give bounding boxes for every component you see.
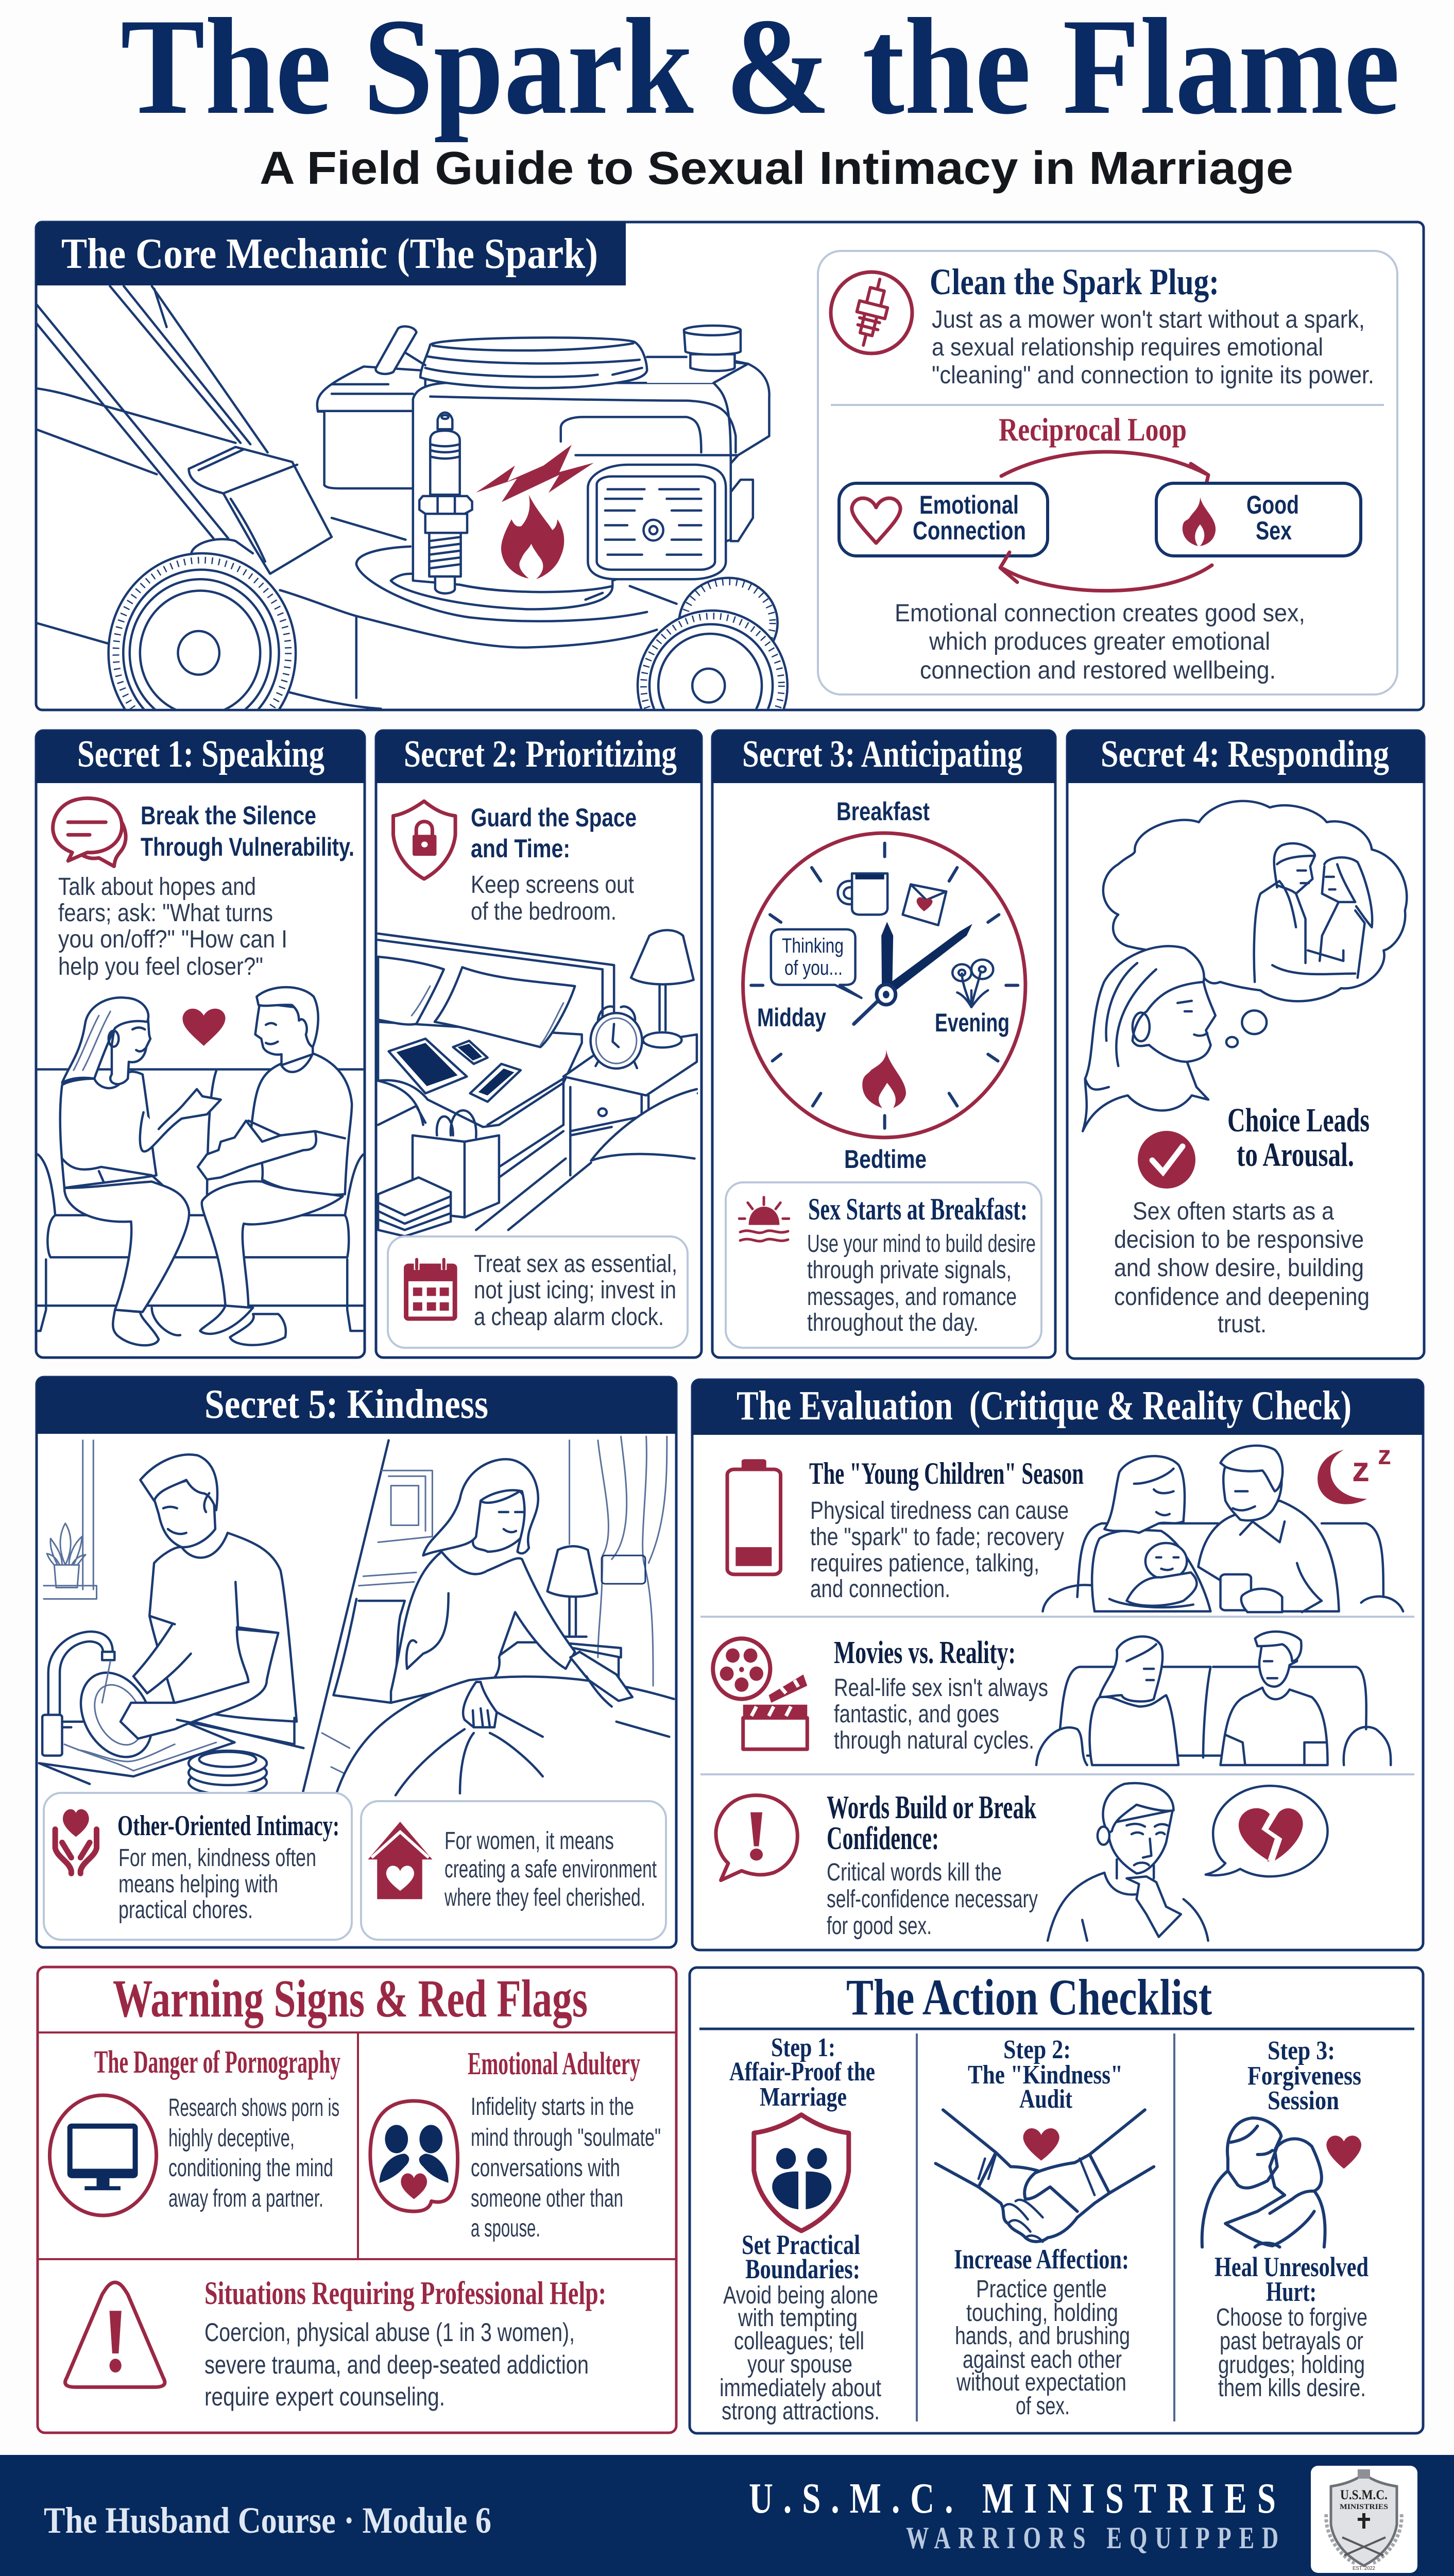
diagram: day clock [743,833,1025,1138]
callout: safe environment [361,1801,666,1940]
row: movies vs reality: through natural cycles. [834,1727,1034,1754]
heading: secret 3 [712,731,1055,783]
heading: secret 1 [36,731,365,783]
icon: broken heart bubble [1206,1786,1328,1876]
icon: film reel and clapper [713,1638,807,1749]
row: movies vs reality: fantastic, and goes [834,1701,999,1728]
icon: thinking speech bubble [771,929,862,998]
text: sex often starts: and show desire, building [1114,1255,1364,1282]
heading: secret 2: Secret 2: Prioritizing [404,733,677,775]
logo badge: EST. 2022 [1353,2566,1375,2571]
icon: heart [182,1009,226,1046]
text: sex often starts [1114,1198,1370,1338]
icon: warning triangle [65,2282,165,2387]
icon: moon and sleep: z [1352,1450,1370,1489]
step 3: past betrayals or [1220,2328,1363,2355]
text: guard the space: and Time: [471,834,570,863]
step 3: Choose to forgive [1216,2304,1367,2331]
block: professional help: require expert counseling. [204,2382,445,2411]
icon: monitor [49,2095,157,2215]
icon: calendar [404,1257,457,1321]
footer course label: The Husband Course · Module 6 [44,2500,491,2541]
row: young children season [727,1440,1403,1612]
callout: sex starts at breakfast: throughout the day. [807,1309,979,1336]
woman profile [1083,946,1216,1131]
footer tagline: WARRIORS EQUIPPED [906,2521,1286,2555]
heading: secret 1: Secret 1: Speaking [77,733,324,775]
icon: flowers [952,960,993,1007]
diagram: day clock: of you... [784,957,843,979]
row: movies vs reality: Movies vs. Reality: [834,1635,1016,1670]
block: danger of pornography: highly deceptive, [168,2125,295,2152]
step 1: Avoid being alone [723,2282,878,2309]
logo badge: U.S.M.C. [1340,2487,1388,2502]
row: young children season: requires patience, talking, [810,1550,1039,1577]
diagram: day clock: Midday [757,1003,826,1032]
block: danger of pornography: Research shows porn is [168,2094,339,2122]
icon: hands holding heart [55,1809,97,1873]
icon: sunrise [739,1197,789,1241]
icon: embracing couple with heart [1202,2118,1361,2247]
step 1: Affair-Proof the [729,2057,875,2087]
text: sex often starts: trust. [1218,1311,1267,1338]
icon: love letter [903,885,946,925]
illustration: tired parents with baby [1042,1446,1403,1612]
footer organisation name: U.S.M.C. MINISTRIES [749,2475,1286,2522]
clock hands [854,922,972,1024]
heading: warning signs: Warning Signs & Red Flags [113,1969,588,2028]
row: words build or break: for good sex. [827,1912,932,1940]
step 1: Set Practical [742,2229,860,2260]
text: break the silence: Break the Silence [141,801,316,830]
arrow: connection to sex [1001,452,1208,488]
block: danger of pornography: conditioning the mind [168,2155,333,2182]
step 1: Boundaries: [745,2253,860,2284]
block: emotional adultery [370,2046,661,2242]
callout: sex starts at breakfast: messages, and romance [807,1283,1017,1311]
heading: secret 5 [37,1377,676,1434]
icon: chat bubbles [53,798,126,867]
thought cloud [1103,801,1407,1001]
step 2: Step 2: [1003,2035,1071,2064]
row: words build or break [716,1783,1328,1941]
block: emotional adultery: someone other than [471,2185,623,2212]
row: movies vs reality: Real-life sex isn't always [834,1674,1048,1702]
heading: core mechanic [36,222,626,285]
text: break the silence: fears; ask: "What turns [58,900,273,927]
callout: treat sex as essential: not just icing; invest in [474,1277,676,1304]
callout: safe environment: where they feel cherished. [444,1884,645,1911]
panel: the core mechanic [36,222,1424,760]
panel: the evaluation [692,1380,1423,1950]
callout: safe environment: For women, it means [444,1827,614,1855]
illustration: lawn mower engine [37,285,789,709]
illustration: couple on sofa [1036,1632,1391,1765]
text: guard the space: Keep screens out [471,871,634,899]
icon: coffee mug [838,873,887,914]
callout: other-oriented intimacy: For men, kindness often [118,1844,316,1872]
step 2 [936,2035,1154,2420]
step 3 [1202,2036,1369,2402]
step 2: Increase Affection: [954,2244,1129,2275]
step 3: Session [1268,2086,1339,2115]
callout: sex starts at breakfast [726,1182,1041,1348]
label: breakfast: Breakfast [836,797,930,826]
text: choice leads to arousal [1227,1101,1370,1174]
subtitle: A Field Guide to Sexual Intimacy in Marriage [260,143,1293,194]
logo badge: MINISTRIES [1340,2503,1388,2511]
block: emotional adultery: conversations with [471,2155,620,2182]
icon: shield with couple [754,2115,849,2231]
step 2: hands, and brushing [955,2323,1130,2350]
text: loop description: which produces greater emotional [929,628,1270,655]
step 1: colleagues; tell [734,2328,864,2355]
step 2: Practice gentle [976,2276,1107,2303]
text: sex often starts: confidence and deepening [1114,1283,1370,1311]
text: clean the spark plug: "cleaning" and connection to ignite its power. [932,362,1374,389]
illustration: wheels [107,552,789,709]
heading: core mechanic: The Core Mechanic (The Spark) [61,230,598,278]
icon: flame [501,495,564,579]
panel: warning signs and red flags [38,1967,676,2433]
panel: secret 4 responding [1067,731,1424,1359]
panel: secret 3 anticipating [712,731,1055,1358]
block: emotional adultery: mind through "soulmate" [471,2124,661,2151]
box: emotional connection: Emotional [919,490,1019,519]
block: emotional adultery: Emotional Adultery [468,2046,640,2081]
text: sex often starts: decision to be responsive [1114,1226,1364,1253]
step 2: of sex. [1016,2393,1070,2420]
callout: treat sex as essential: a cheap alarm clock. [474,1303,664,1331]
diagram: reciprocal loop: Reciprocal Loop [999,411,1187,448]
callout: treat sex as essential [388,1236,688,1348]
row: young children season: and connection. [810,1575,950,1603]
panel: secret 1 speaking [36,731,365,1358]
text: choice leads to arousal: to Arousal. [1237,1136,1354,1174]
logo badge [1311,2466,1417,2573]
row: movies vs reality [713,1632,1391,1765]
text: loop description: connection and restored wellbeing. [920,657,1276,684]
text: clean the spark plug: a sexual relationship requires emotional [932,334,1323,361]
box: emotional connection [839,483,1048,556]
box: emotional connection: Connection [913,516,1026,545]
text: sex often starts: Sex often starts as a [1133,1198,1334,1225]
panel: secret 5 kindness [37,1377,676,1947]
heading: secret 2 [376,731,702,783]
block: danger of pornography [49,2045,340,2215]
row: words build or break: Confidence: [827,1820,939,1856]
step 3: Forgiveness [1247,2061,1361,2091]
box: good sex [1156,483,1361,556]
icon: flame [862,1049,906,1108]
panel: secret 2 prioritizing [376,731,702,1358]
card: clean the spark plug and reciprocal loop [818,251,1397,694]
text: guard the space: Guard the Space [471,803,637,832]
box: good sex: Sex [1256,516,1292,545]
callout: sex starts at breakfast: Use your mind to build desire [807,1230,1036,1258]
heading: action checklist: The Action Checklist [846,1969,1212,2026]
step 2: touching, holding [966,2299,1118,2327]
panel: the action checklist [690,1968,1423,2433]
text: loop description: Emotional connection creates good sex, [895,600,1305,627]
step 3: Heal Unresolved [1214,2251,1369,2282]
icon: moon and sleep [1318,1440,1391,1504]
icon: two people with heart [370,2101,458,2211]
text: guard the space [471,803,637,925]
callout: safe environment: creating a safe environment [444,1856,657,1883]
text: choice leads to arousal: Choice Leads [1227,1101,1370,1139]
icon: shield with lock [394,801,455,879]
block: danger of pornography: The Danger of Pornography [94,2045,340,2080]
callout: sex starts at breakfast: through private signals, [807,1257,1012,1284]
icon: exclamation speech bubble [716,1795,797,1880]
step 2: against each other [963,2346,1122,2374]
footer [0,2455,1454,2576]
row: young children season: the "spark" to fade; recovery [810,1523,1064,1551]
divider slash [302,1440,389,1795]
text: break the silence: Through Vulnerability. [141,833,354,861]
block: emotional adultery: a spouse. [471,2215,540,2242]
text: clean the spark plug [930,261,1374,389]
diagram: day clock: Evening [935,1008,1010,1037]
box: good sex: Good [1246,490,1299,519]
row: young children season: Physical tiredness can cause [810,1497,1069,1524]
heading: secret 4 [1067,731,1424,783]
text: clean the spark plug: Clean the Spark Plug: [930,261,1219,302]
step 1: Marriage [760,2082,847,2112]
diagram: day clock: Thinking [782,935,844,957]
heading: secret 3: Secret 3: Anticipating [742,733,1022,775]
text: clean the spark plug: Just as a mower won't start without a spark, [932,306,1365,333]
block: emotional adultery: Infidelity starts in the [471,2093,634,2121]
block: danger of pornography: away from a partner. [168,2185,323,2212]
text: break the silence [58,801,354,980]
callout: sex starts at breakfast: Sex Starts at Breakfast: [808,1192,1028,1226]
text: break the silence: Talk about hopes and [58,873,256,901]
block: professional help: Situations Requiring Professional Help: [204,2275,606,2311]
step 3: Hurt: [1266,2276,1316,2307]
text: break the silence: you on/off?" "How can I [58,926,287,953]
icon: spark plug badge [831,272,912,353]
text: break the silence: help you feel closer?" [58,953,263,980]
icon: house with heart [368,1822,432,1899]
diagram: reciprocal loop [839,411,1361,591]
step 1: immediately about [720,2375,881,2402]
illustration: woman imagining embrace [1083,801,1407,1131]
block: professional help: Coercion, physical abuse (1 in 3 women), [204,2318,575,2347]
callout: treat sex as essential: Treat sex as essential, [474,1250,677,1278]
callout: other-oriented intimacy [44,1793,352,1940]
callout: other-oriented intimacy: Other-Oriented Intimacy: [117,1810,339,1842]
heading: secret 4: Secret 4: Responding [1101,733,1389,775]
arrow: sex to connection [1000,552,1212,591]
illustration: couple talking on sofa [38,987,363,1345]
callout: other-oriented intimacy: practical chores. [118,1896,253,1924]
step 1 [720,2033,881,2425]
icon: check mark [1138,1131,1195,1189]
step 1: Step 1: [771,2033,835,2062]
icon: low battery [727,1459,781,1574]
row: words build or break: Words Build or Break [827,1789,1036,1825]
step 3: Step 3: [1268,2036,1335,2065]
step 2: without expectation [956,2369,1126,2396]
step 1: strong attractions. [722,2398,880,2425]
illustration: bedroom without screens [378,930,697,1236]
illustration: man washing dishes and woman preparing bed [39,1436,674,1795]
icon: spark plug [419,413,472,594]
step 3: grudges; holding [1218,2351,1365,2379]
icon: lightning bolt [476,445,594,502]
row: words build or break: self-confidence necessary [827,1886,1038,1913]
row: young children season: The "Young Children" Season [809,1456,1084,1490]
step 1: with tempting [738,2304,858,2332]
step 2: The "Kindness" [968,2060,1123,2090]
heading: secret 5: Secret 5: Kindness [204,1382,488,1427]
callout: other-oriented intimacy: means helping with [118,1871,278,1898]
step 1: your spouse [747,2351,852,2378]
block: professional help [65,2275,606,2411]
label: bedtime: Bedtime [844,1145,927,1174]
icon: handshake with heart [936,2110,1154,2242]
icon: moon and sleep: z [1378,1440,1391,1470]
step 2: Audit [1019,2084,1073,2114]
illustration: sad man [1048,1783,1328,1941]
text: guard the space: of the bedroom. [471,898,617,925]
step 3: them kills desire. [1218,2375,1366,2402]
row: words build or break: Critical words kill the [827,1859,1002,1886]
text: loop description [895,600,1305,684]
block: professional help: severe trauma, and deep-seated addiction [204,2350,589,2379]
